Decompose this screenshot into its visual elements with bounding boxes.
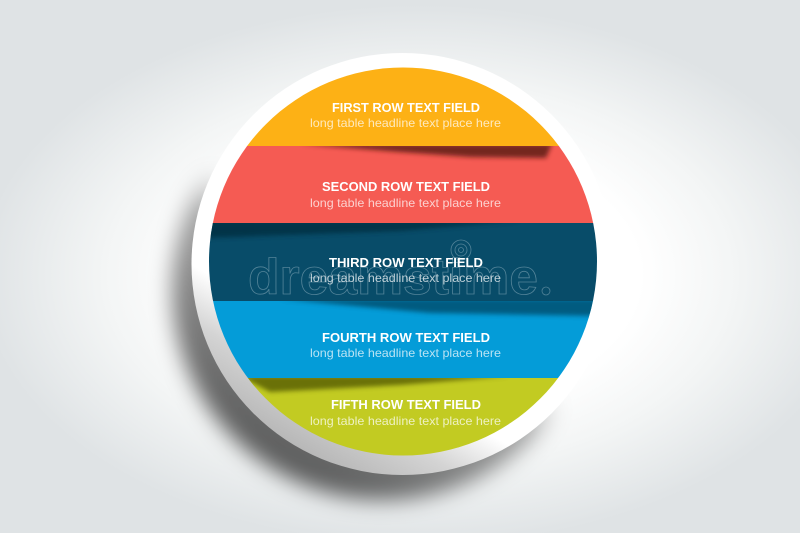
disc drop shadow	[172, 78, 594, 500]
row 5 text: FIFTH ROW TEXT FIELD	[331, 397, 481, 412]
row 3 text: THIRD ROW TEXT FIELD	[329, 255, 483, 270]
band: fourth row blue	[213, 301, 593, 378]
row 2 text: SECOND ROW TEXT FIELD	[322, 179, 490, 194]
row 1 text	[310, 100, 501, 130]
row 2 text	[310, 179, 501, 210]
band: first row yellow	[247, 68, 559, 146]
row 3 text: long table headline text place here	[310, 271, 501, 285]
row 5 text: long table headline text place here	[310, 414, 501, 428]
row 4 text: FOURTH ROW TEXT FIELD	[322, 330, 490, 345]
row 1 text: long table headline text place here	[310, 116, 501, 130]
watermark: dreamstime	[248, 249, 538, 305]
row 1 text: FIRST ROW TEXT FIELD	[332, 100, 480, 115]
row 5 text	[310, 397, 501, 428]
row 4 text: long table headline text place here	[310, 346, 501, 360]
band: third row navy	[200, 221, 620, 301]
row 4 text	[310, 330, 501, 360]
band: second row red	[212, 146, 594, 223]
row 3 text	[310, 255, 501, 285]
row 2 text: long table headline text place here	[310, 196, 501, 210]
colour disc	[200, 60, 620, 458]
white ring disc	[192, 53, 614, 475]
band: fifth row green	[248, 378, 558, 456]
